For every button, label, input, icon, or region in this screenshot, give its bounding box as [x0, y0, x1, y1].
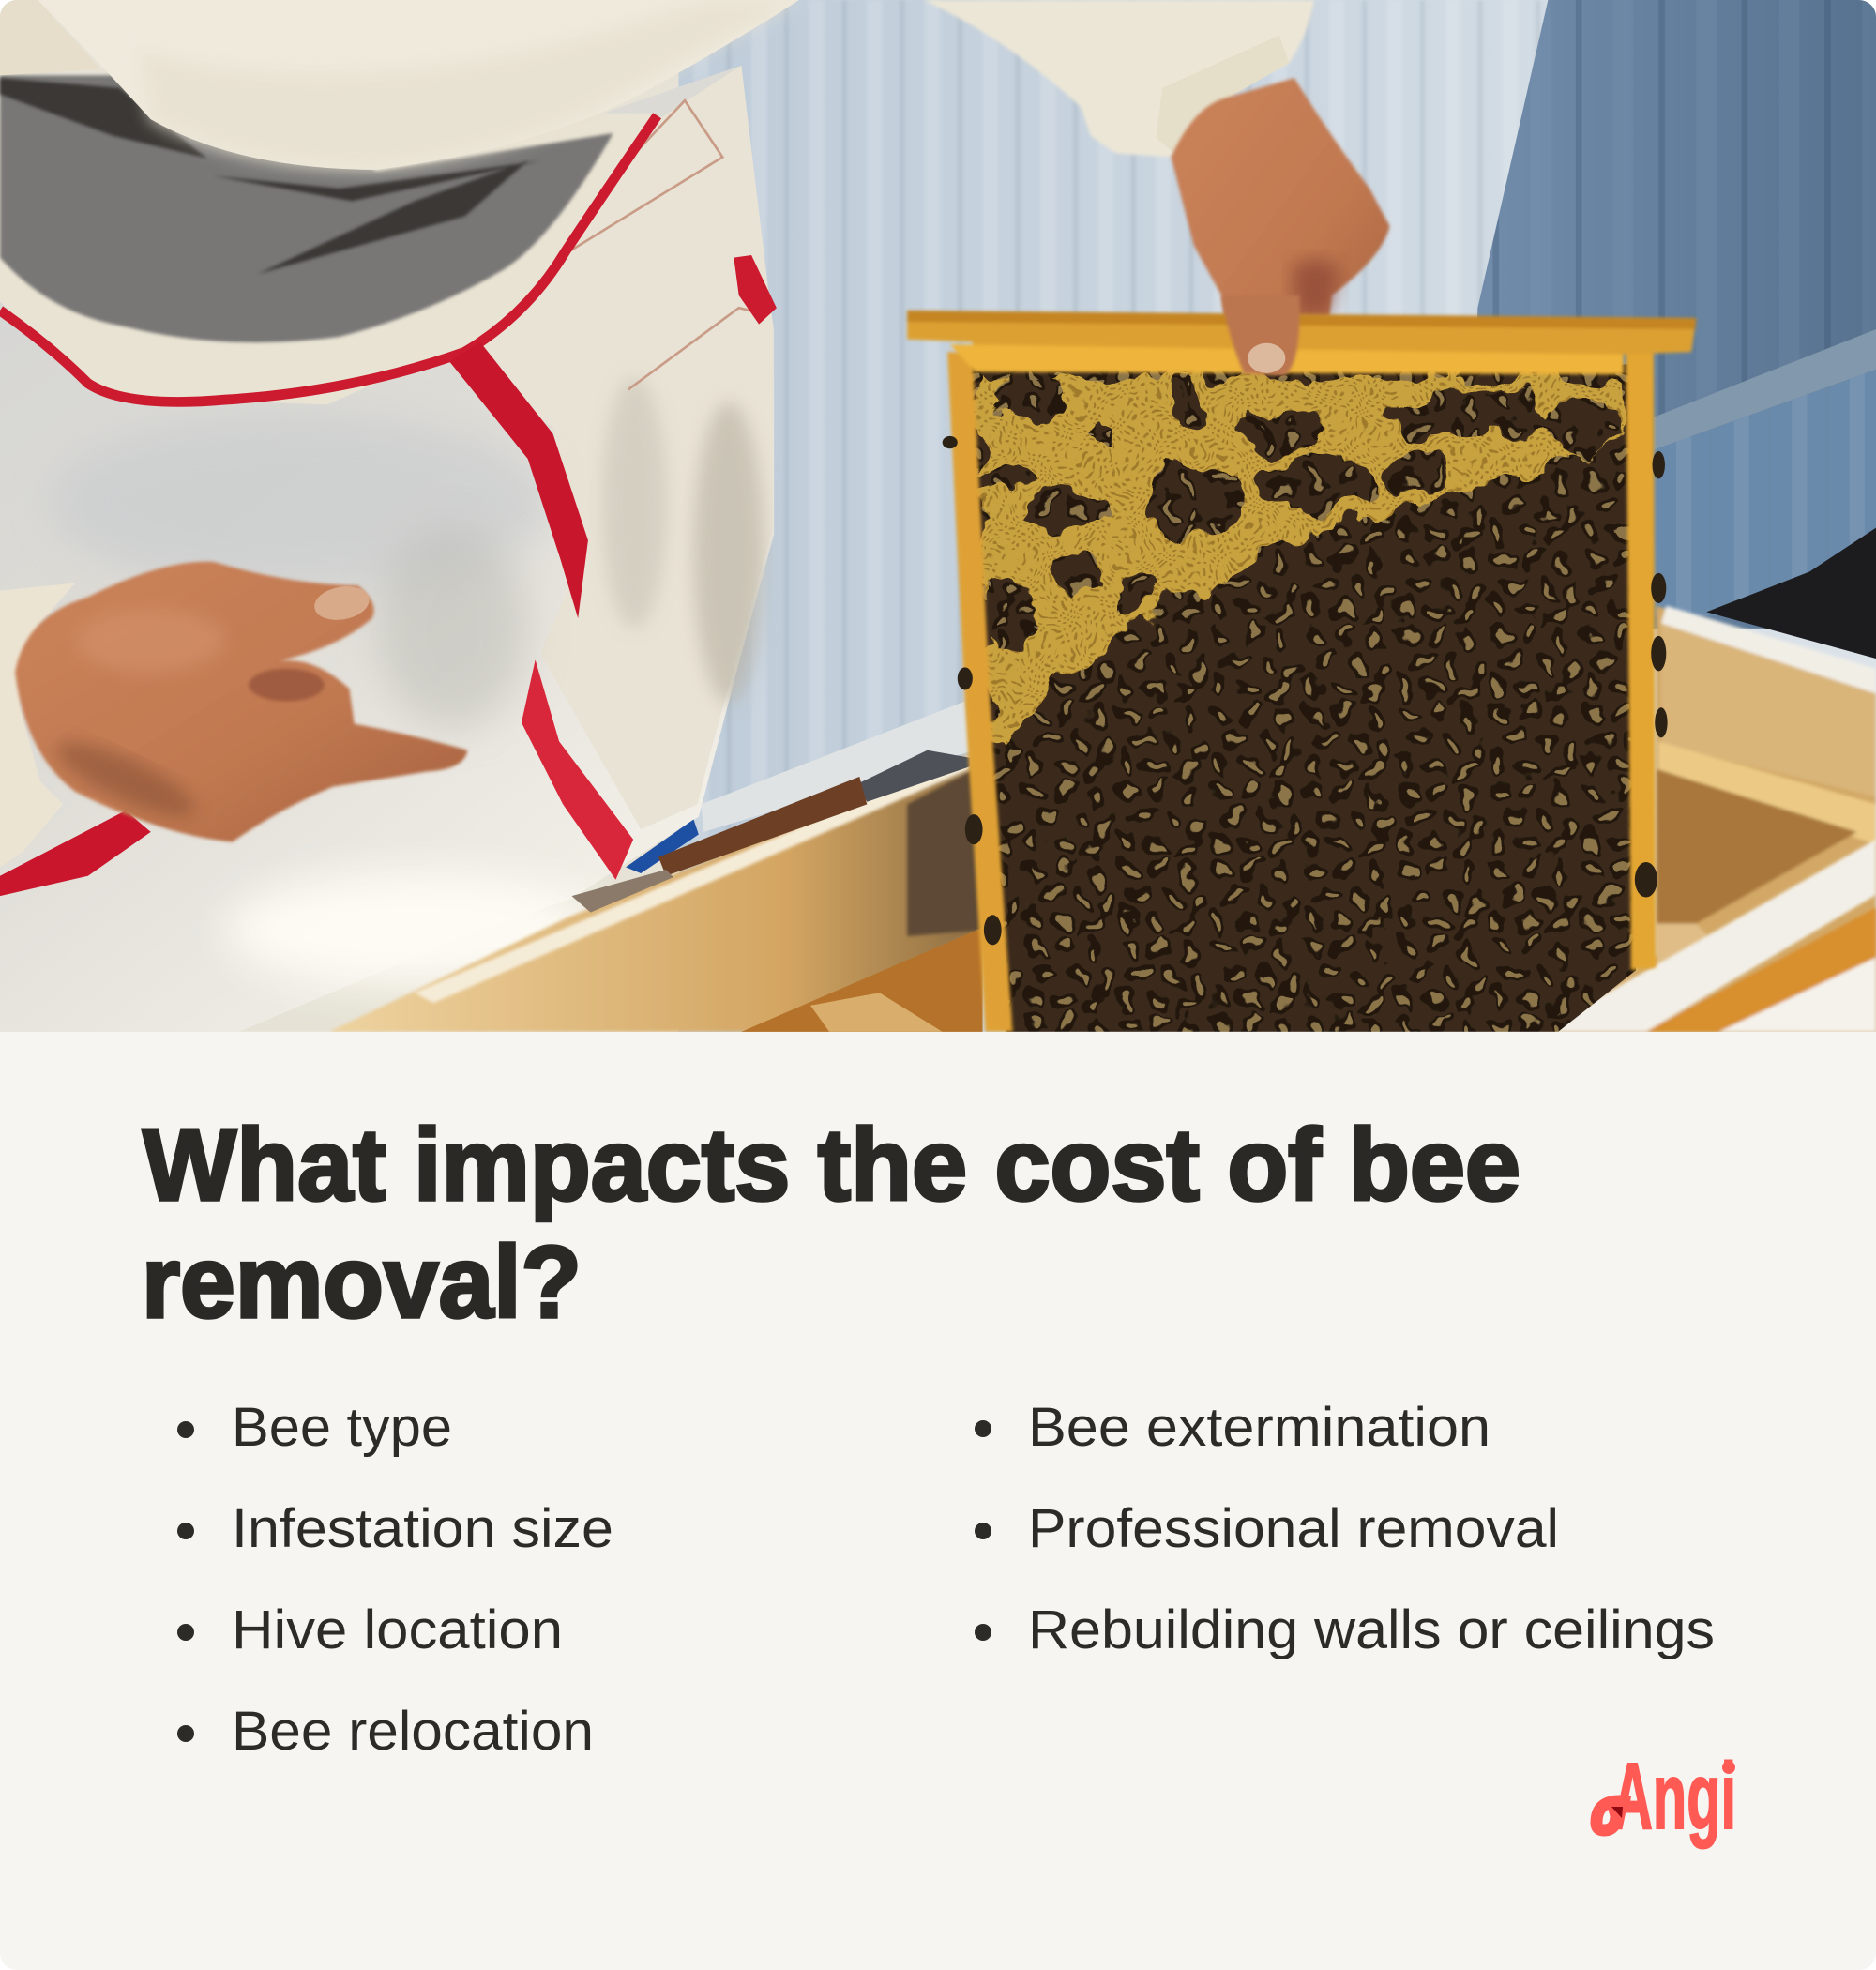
hand shadows and fingernail: [49, 583, 371, 829]
hive tool blade: [857, 750, 970, 802]
red trim at lower left: [0, 811, 151, 896]
right bullet list: Bee extermination: [1028, 1397, 1490, 1458]
grey veil mesh: [0, 75, 613, 342]
base fill behind the photo shapes: [0, 0, 678, 1032]
right bullet list: Rebuilding walls or ceilings: [1028, 1599, 1715, 1660]
heading: removal?: [142, 1225, 582, 1340]
left bullet list: Bee type: [232, 1397, 452, 1458]
hat brim: [38, 0, 799, 170]
shelf edge against wall: [701, 702, 970, 832]
suit pocket and shoulder shading: [51, 66, 773, 987]
curled fingers shadow: [1292, 260, 1339, 314]
right bullet list: [975, 1397, 1715, 1660]
red button tab: [734, 255, 777, 325]
left bullet list: Bee relocation: [232, 1701, 594, 1762]
red zipper lower: [522, 659, 633, 880]
corrugated wall, shaded part with rail: [1470, 0, 1876, 629]
left cuff: [0, 583, 75, 867]
bee clusters on the wax: [980, 372, 1621, 651]
heading: [142, 1108, 1520, 1340]
honeycomb dark brood area with bees: [958, 358, 1646, 1043]
hive box, far side: [1546, 606, 1876, 1032]
blue shirt glimpse: [626, 819, 699, 873]
hand holding frame: [1171, 78, 1390, 374]
corrugated wall, sunlit part: [678, 0, 1876, 1032]
hive tool lower blade: [572, 870, 673, 913]
left bullet list: Infestation size: [232, 1498, 613, 1559]
inner slat: [810, 993, 943, 1032]
frame side bars: [947, 349, 1657, 1032]
right bullet list: Professional removal: [1028, 1498, 1559, 1559]
heading: What impacts the cost of bee: [143, 1108, 1520, 1222]
hive box, near side with white edge: [1539, 840, 1876, 1032]
sleeve cuff: [1156, 36, 1289, 153]
hat brim shading: [138, 0, 799, 170]
Angi logo: [1596, 1744, 1736, 1849]
beekeeper suit body: [0, 66, 774, 1032]
honeycomb yellow wax area: [976, 377, 1626, 741]
red zipper upper: [450, 341, 588, 618]
hive tool wooden handle: [658, 777, 867, 876]
left bullet list: Hive location: [232, 1599, 563, 1660]
thumb over frame: [1221, 296, 1299, 376]
photo: beekeeper holding honeycomb frame: [0, 0, 1876, 1032]
dark veil folds: [0, 78, 540, 274]
hat crown edge left: [0, 0, 100, 75]
left bullet list: [177, 1397, 613, 1762]
box front plank: [329, 754, 983, 1032]
veil collar: [0, 114, 654, 404]
Angi logo: Angi: [1612, 1744, 1736, 1849]
frame top bar: [907, 311, 1696, 374]
thumbnail over frame: [1248, 343, 1285, 373]
red veil trim: [0, 115, 658, 402]
bees crawling over the frame edges: [943, 436, 1668, 945]
right sleeve: [924, 0, 1314, 157]
box inner orange: [741, 928, 983, 1032]
dark gap behind hive box: [1706, 528, 1876, 659]
pointing hand: [15, 562, 467, 842]
plank dark end and edge: [415, 754, 983, 1003]
text and logo area: [141, 1108, 1736, 1850]
